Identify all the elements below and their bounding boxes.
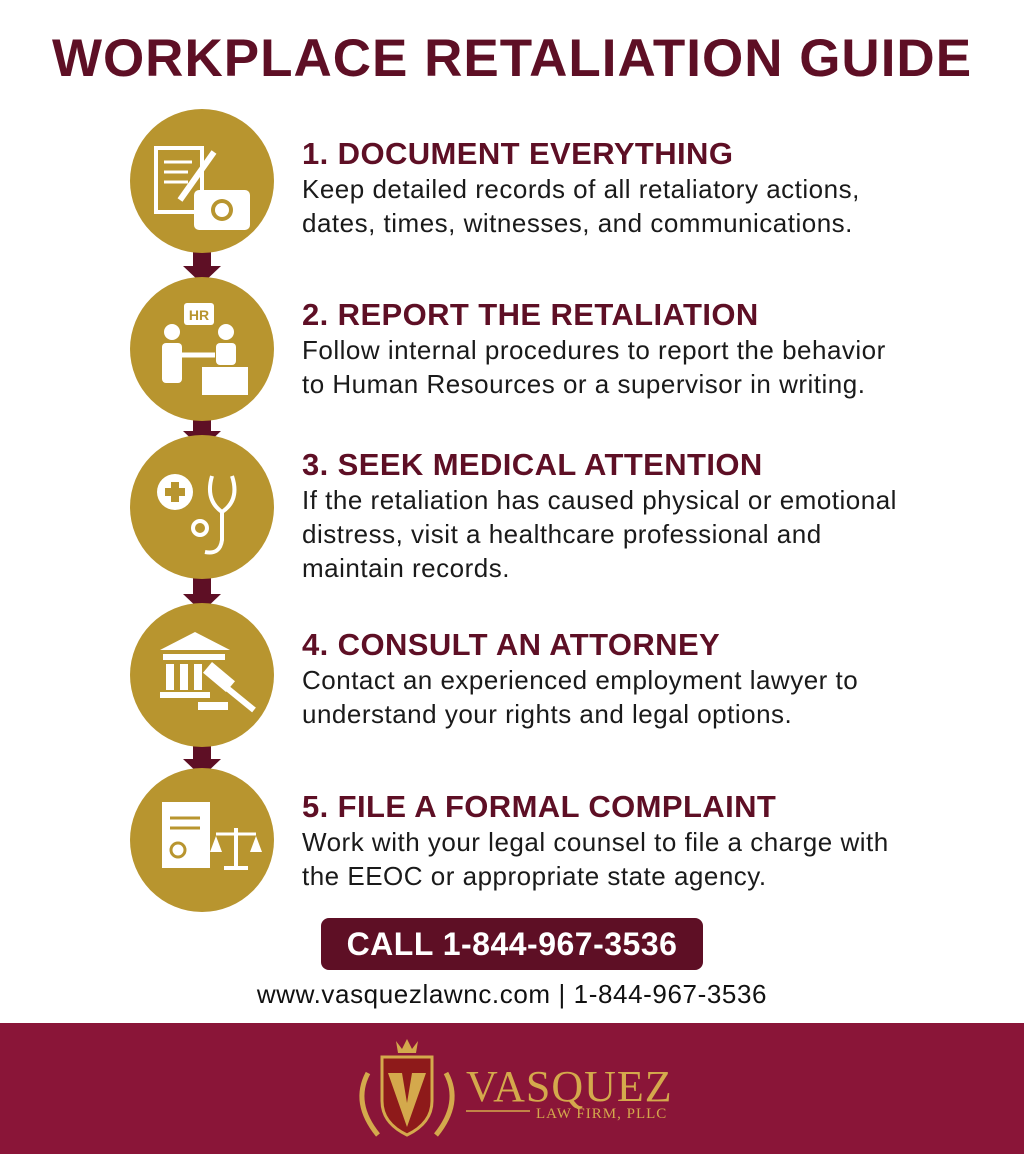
step 3 text: distress, visit a healthcare professional and xyxy=(302,519,822,549)
icon: document and camera xyxy=(130,109,274,253)
icon: complaint document and scales xyxy=(130,768,274,912)
step 5 text xyxy=(302,789,889,891)
step icons column xyxy=(130,109,274,912)
step 4 text: Contact an experienced employment lawyer to xyxy=(302,665,858,695)
step 3 text: 3. SEEK MEDICAL ATTENTION xyxy=(302,447,763,482)
icon: courthouse and gavel xyxy=(130,603,274,747)
step 5 text: 5. FILE A FORMAL COMPLAINT xyxy=(302,789,776,824)
step 2 text: 2. REPORT THE RETALIATION xyxy=(302,297,759,332)
step 5 text: Work with your legal counsel to file a charge with xyxy=(302,827,889,857)
step 2 text xyxy=(302,297,886,399)
step 4 text: 4. CONSULT AN ATTORNEY xyxy=(302,627,720,662)
footer with logo: LAW FIRM, PLLC xyxy=(536,1106,667,1122)
footer with logo xyxy=(0,1023,1024,1154)
logo wordmark: VASQUEZ xyxy=(466,1062,673,1111)
logo crest xyxy=(362,1039,452,1135)
step 3 text: If the retaliation has caused physical or emotional xyxy=(302,485,897,515)
step 4 text xyxy=(302,627,858,729)
call button: CALL 1-844-967-3536 xyxy=(347,926,677,962)
step 2 text: to Human Resources or a supervisor in writing. xyxy=(302,369,865,399)
arrows xyxy=(183,240,221,777)
icon: HR meeting xyxy=(130,277,274,421)
icon: HR meeting: HR xyxy=(189,307,209,323)
icon: medical xyxy=(130,435,274,579)
step 1 text: 1. DOCUMENT EVERYTHING xyxy=(302,136,733,171)
step 1 text xyxy=(302,136,860,238)
step 2 text: Follow internal procedures to report the behavior xyxy=(302,335,886,365)
step 1 text: Keep detailed records of all retaliatory actions, xyxy=(302,174,860,204)
step 4 text: understand your rights and legal options. xyxy=(302,699,792,729)
step 1 text: dates, times, witnesses, and communications. xyxy=(302,208,853,238)
step 3 text xyxy=(302,447,897,583)
website line: www.vasquezlawnc.com | 1-844-967-3536 xyxy=(257,979,767,1009)
step 5 text: the EEOC or appropriate state agency. xyxy=(302,861,767,891)
call button xyxy=(321,918,703,970)
step 3 text: maintain records. xyxy=(302,553,510,583)
title: WORKPLACE RETALIATION GUIDE xyxy=(52,29,972,88)
